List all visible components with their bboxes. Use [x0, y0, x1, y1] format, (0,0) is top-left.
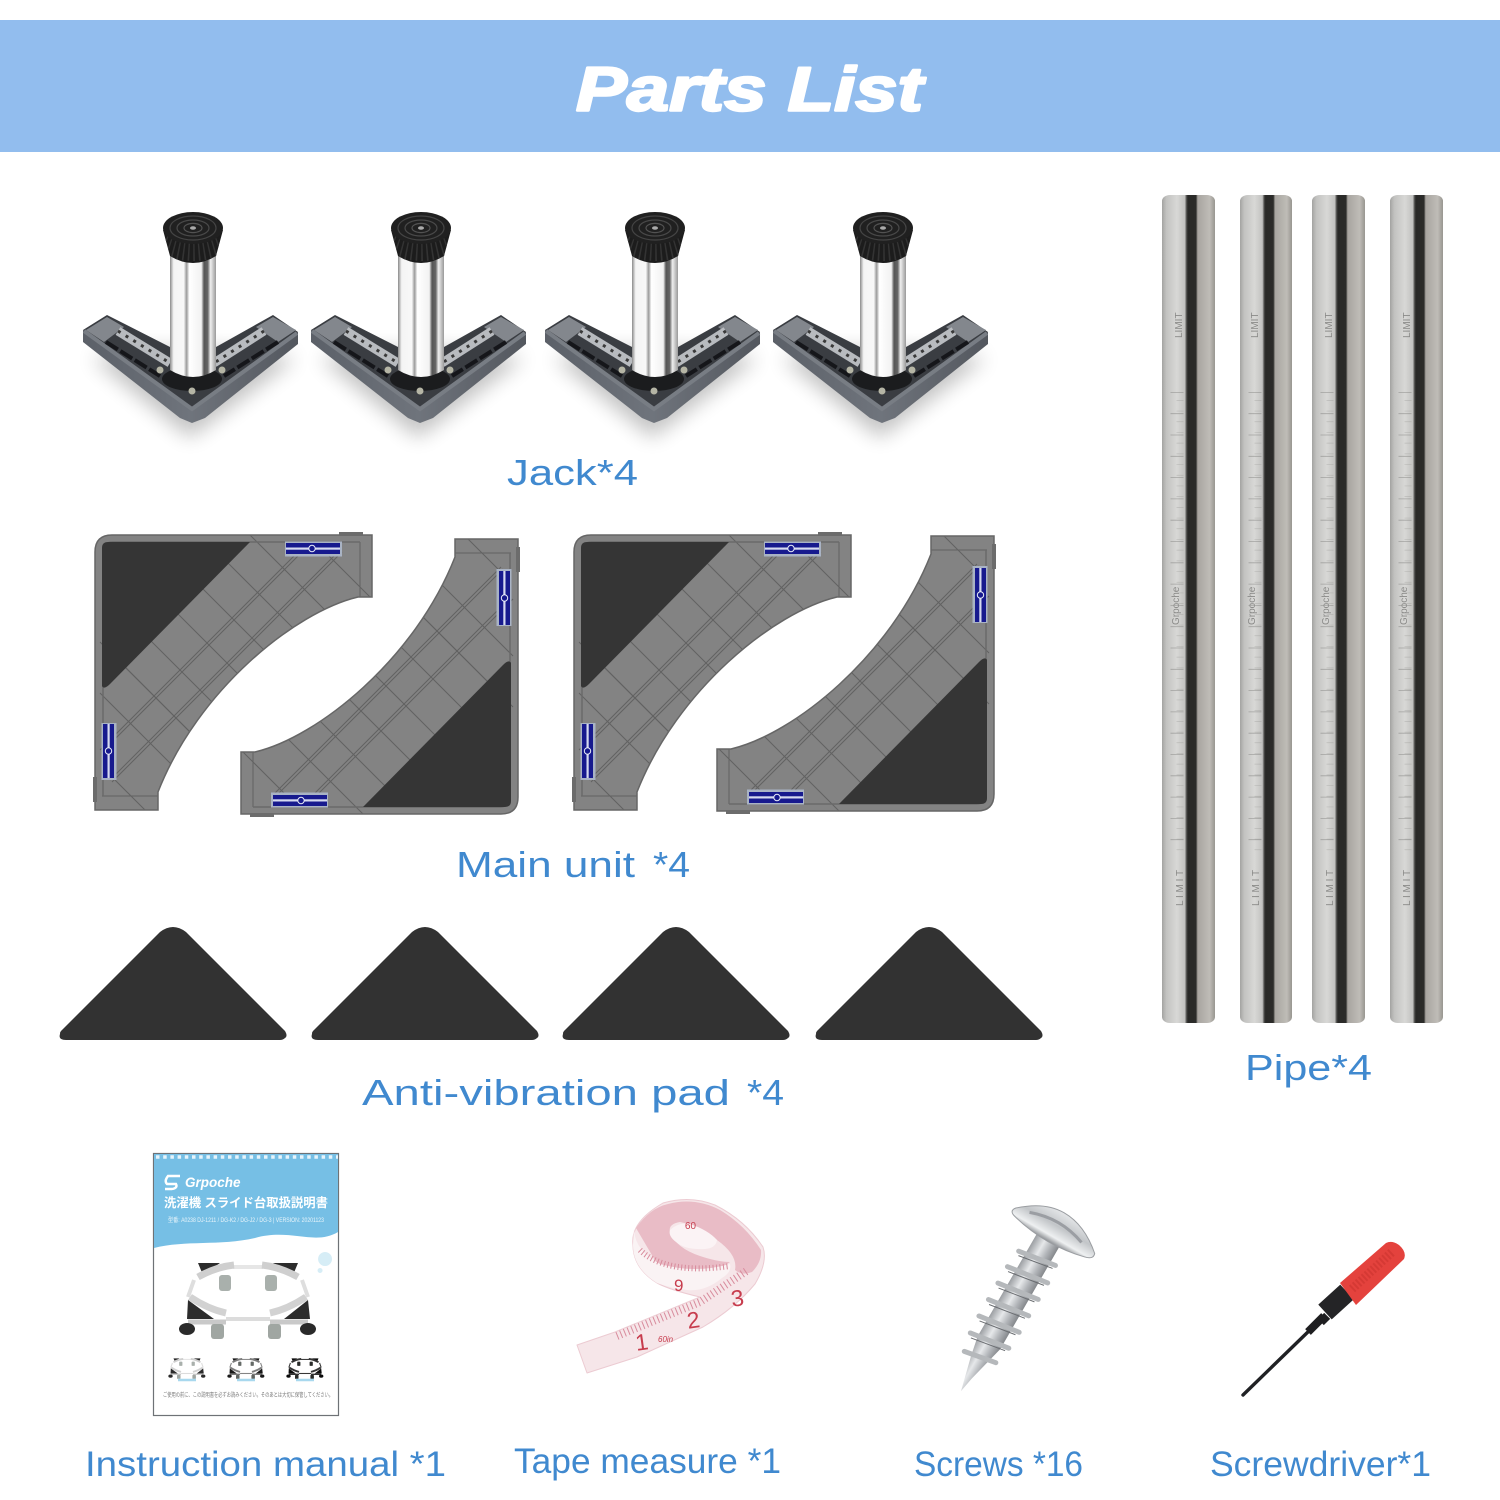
main unit 1	[93, 532, 372, 825]
manual cover	[154, 1154, 338, 1416]
tape coil ring	[636, 1202, 761, 1275]
label: manual: Instruction manual *1	[85, 1445, 446, 1484]
logo mark	[165, 1176, 180, 1189]
label: main unit: Main unit	[456, 844, 635, 885]
manual main stand	[179, 1263, 316, 1339]
pipe 4: LIMIT	[1402, 312, 1413, 338]
panel: tape measure	[514, 1199, 781, 1481]
tape numbers: 3	[729, 1284, 746, 1312]
manual logo: Grpoche	[185, 1175, 241, 1190]
pad 1	[60, 927, 286, 1040]
label: jack: Jack*4	[507, 452, 638, 493]
tape coil front	[633, 1228, 730, 1290]
small stand captions	[178, 1379, 314, 1381]
label: pads: Anti-vibration pad	[362, 1072, 730, 1113]
screw head	[1008, 1190, 1105, 1265]
panel: main units	[93, 521, 996, 885]
tape numbers	[634, 1219, 746, 1356]
pipe 2: L I M I T	[1251, 870, 1262, 906]
pipe 3: LIMIT	[1324, 312, 1335, 338]
jack 1	[83, 212, 298, 438]
pipe 3: Grpoche	[1321, 586, 1332, 625]
panel: pipes	[1162, 195, 1443, 1088]
jack 2	[311, 212, 526, 438]
manual dots	[156, 1155, 338, 1159]
panel: anti-vibration pads	[60, 927, 1043, 1113]
tape silhouette	[577, 1199, 764, 1373]
banner	[0, 20, 1500, 152]
panel: screws	[914, 1190, 1105, 1484]
screw shaft	[950, 1234, 1059, 1398]
panel: instruction manual	[85, 1154, 446, 1484]
jack 4	[773, 212, 988, 438]
jack 3	[545, 212, 760, 438]
manual title: 洗濯機 スライド台取扱説明書	[164, 1195, 328, 1210]
screw icon	[921, 1190, 1105, 1415]
tape hole	[670, 1224, 717, 1249]
main unit 3	[572, 532, 851, 825]
manual subtitle: 型番: A0238 DJ-1211 / DG-K2 / DG-J2 / DG-3 | VERSION: 20201123	[168, 1216, 325, 1224]
small stand 1	[168, 1358, 205, 1379]
label: pads: *4	[747, 1072, 784, 1113]
manual bubbles	[318, 1252, 332, 1273]
panel: screwdriver	[1210, 1242, 1431, 1484]
pipe 1: Grpoche	[1171, 586, 1182, 625]
pad 4	[816, 927, 1042, 1040]
manual header	[154, 1154, 338, 1248]
pad 2	[312, 927, 538, 1040]
label: tape: Tape measure *1	[514, 1442, 781, 1481]
pipe 3: L I M I T	[1325, 870, 1336, 906]
panel: jacks	[83, 212, 988, 493]
small stand 2	[227, 1358, 264, 1379]
tape edge ticks	[640, 1250, 730, 1268]
pipe 4: L I M I T	[1402, 870, 1413, 906]
pipe 1	[1162, 195, 1215, 1023]
tape numbers: 09	[684, 1219, 696, 1230]
screwdriver icon	[1243, 1242, 1405, 1395]
pipe 2: LIMIT	[1250, 312, 1261, 338]
title: Parts List	[576, 56, 926, 124]
label: main unit: *4	[653, 844, 690, 885]
screwdriver collar	[1308, 1316, 1324, 1332]
label: pipes: Pipe*4	[1245, 1047, 1372, 1088]
pipe 4: Grpoche	[1399, 586, 1410, 625]
tape ruler ticks	[617, 1270, 748, 1336]
screwdriver shaft	[1243, 1328, 1312, 1395]
pipe 1: LIMIT	[1174, 312, 1185, 338]
screwdriver handle	[1340, 1242, 1405, 1305]
screw threads	[960, 1245, 1057, 1370]
main unit 4	[717, 521, 996, 814]
pipe 4	[1390, 195, 1443, 1023]
small stand 3	[286, 1358, 323, 1379]
pipe 2	[1240, 195, 1292, 1023]
main unit 2	[241, 524, 520, 817]
pipe 3	[1312, 195, 1365, 1023]
pipe 2: Grpoche	[1247, 586, 1258, 625]
tape coil	[577, 1199, 764, 1373]
manual note: ご使用の前に、この説明書を必ずお読みください。そのあとは大切に保管してください。	[163, 1391, 333, 1399]
tape numbers: 2	[685, 1306, 702, 1334]
pipe 1: L I M I T	[1175, 870, 1186, 906]
tape numbers: 60in	[658, 1335, 674, 1344]
label: screws: Screws *16	[914, 1445, 1083, 1484]
tape numbers: 1	[634, 1328, 650, 1356]
tape numbers: 9	[674, 1276, 683, 1295]
pad 3	[563, 927, 790, 1040]
label: screwdriver: Screwdriver*1	[1210, 1445, 1431, 1484]
